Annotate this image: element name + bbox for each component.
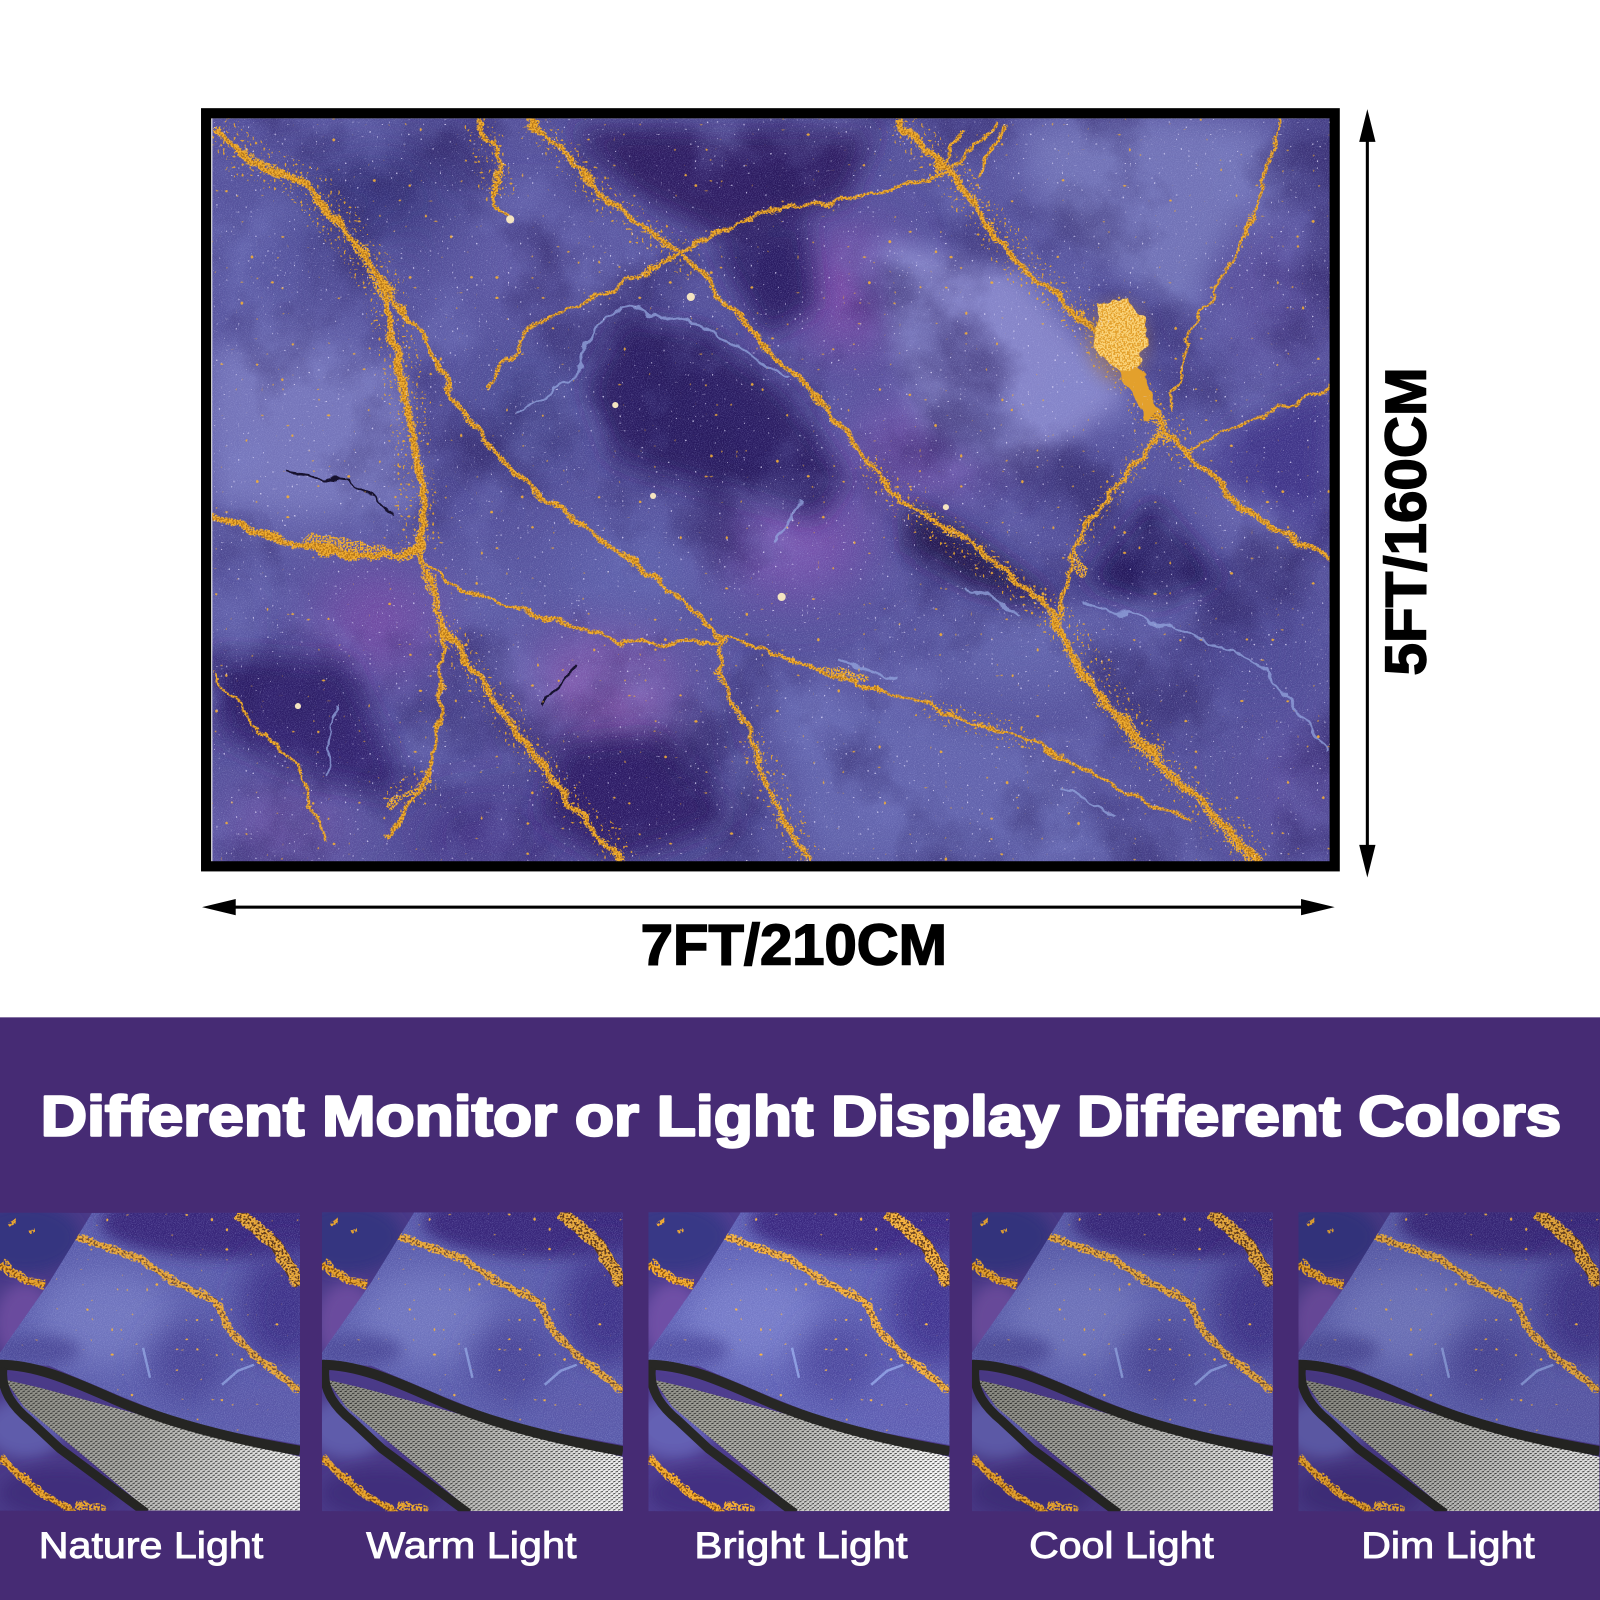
label: width: 7FT/210CM (641, 913, 947, 977)
heading: Different Monitor or Light Display Different Colors (41, 1085, 1561, 1148)
rug: marble pattern with black frame (204, 113, 1357, 867)
arrow: height dimension (1359, 109, 1376, 878)
caption: nature light: Nature Light (39, 1525, 263, 1566)
gold burst (1087, 296, 1163, 420)
gold and white speckles (212, 118, 1332, 862)
pale blue cracks (327, 304, 1327, 816)
black cracks (286, 471, 577, 704)
arrow: width dimension (202, 899, 1335, 915)
caption: warm light: Warm Light (366, 1525, 577, 1566)
thumbnail: nature light (0, 1187, 360, 1518)
thumbnail: bright light (618, 1186, 1010, 1518)
gold vein glitter (212, 120, 1332, 862)
gold vein base (212, 120, 1332, 862)
gold spray around veins (218, 120, 1260, 862)
thumbnail: cool light (942, 1186, 1333, 1518)
caption: cool light: Cool Light (1029, 1525, 1214, 1566)
caption: bright light: Bright Light (694, 1525, 908, 1566)
caption: dim light: Dim Light (1361, 1525, 1535, 1566)
panel: light comparison band (0, 1017, 1600, 1600)
thumbnail: dim light (1268, 1186, 1600, 1518)
label: height: 5FT/160CM (1375, 367, 1439, 676)
thumbnail: warm light (292, 1186, 683, 1518)
dark and light marble patches (212, 128, 1332, 862)
